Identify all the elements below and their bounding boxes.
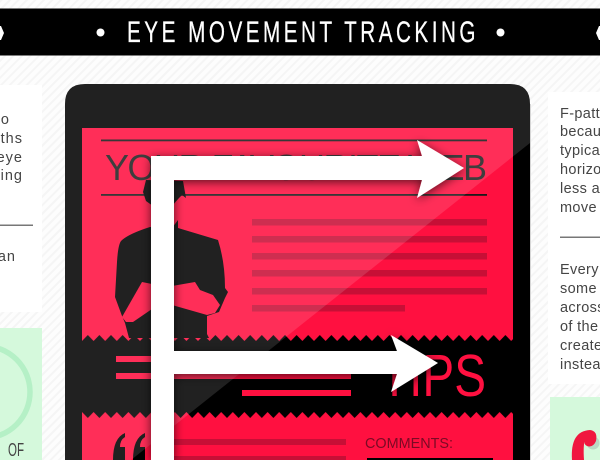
right paragraph two: some — [560, 281, 597, 297]
silhouette right forearm — [172, 282, 220, 315]
silhouette head — [143, 180, 186, 206]
lower text bars — [160, 439, 346, 460]
right paragraph two: instea — [560, 357, 600, 373]
silhouette left forearm — [122, 282, 152, 322]
icon: red quotation mark — [572, 430, 600, 460]
F-pattern white arrow — [151, 140, 464, 460]
right paragraph one: less a — [560, 181, 600, 197]
left paragraph one — [0, 112, 23, 184]
right divider — [560, 236, 600, 238]
stat ring — [0, 346, 30, 438]
banner end ornament: right — [596, 26, 600, 40]
silhouette torso — [115, 220, 228, 338]
banner end ornament: left — [0, 26, 4, 40]
diagonal screen glare — [65, 84, 530, 460]
tablet illustration — [65, 84, 530, 460]
banner bullet: right — [496, 28, 504, 36]
title banner — [0, 8, 600, 56]
band red bars — [116, 356, 351, 396]
black zigzag band — [82, 335, 513, 418]
website heading: YOUR FAVOURITE WEB — [105, 147, 487, 188]
website header rules — [101, 140, 487, 196]
silhouette of person with crossed arms — [115, 180, 228, 338]
band heading: TIPS — [380, 343, 486, 409]
panel: left green stat card — [0, 328, 42, 460]
right paragraph two: of the — [560, 319, 598, 335]
right paragraph two — [560, 262, 600, 373]
panel: right green quote card — [550, 397, 600, 460]
stat label: OF — [8, 440, 24, 460]
screen — [82, 128, 513, 460]
banner bullet: left — [96, 28, 104, 36]
right paragraph two: Every — [560, 262, 599, 278]
right paragraph one: F-patt — [560, 106, 600, 122]
quotation marks — [113, 433, 145, 460]
right paragraph one: typica — [560, 143, 600, 159]
panel: left text column — [0, 85, 42, 312]
left divider — [0, 224, 33, 226]
tablet right edge highlight — [530, 104, 531, 460]
article text bars — [252, 219, 487, 312]
tablet body — [65, 84, 530, 460]
right paragraph one: move — [560, 200, 597, 216]
panel: right text column — [548, 92, 600, 384]
comments label: COMMENTS: — [365, 435, 453, 452]
comments rule — [367, 458, 493, 460]
right paragraph one — [560, 106, 600, 216]
left paragraph one: ths — [1, 131, 23, 147]
